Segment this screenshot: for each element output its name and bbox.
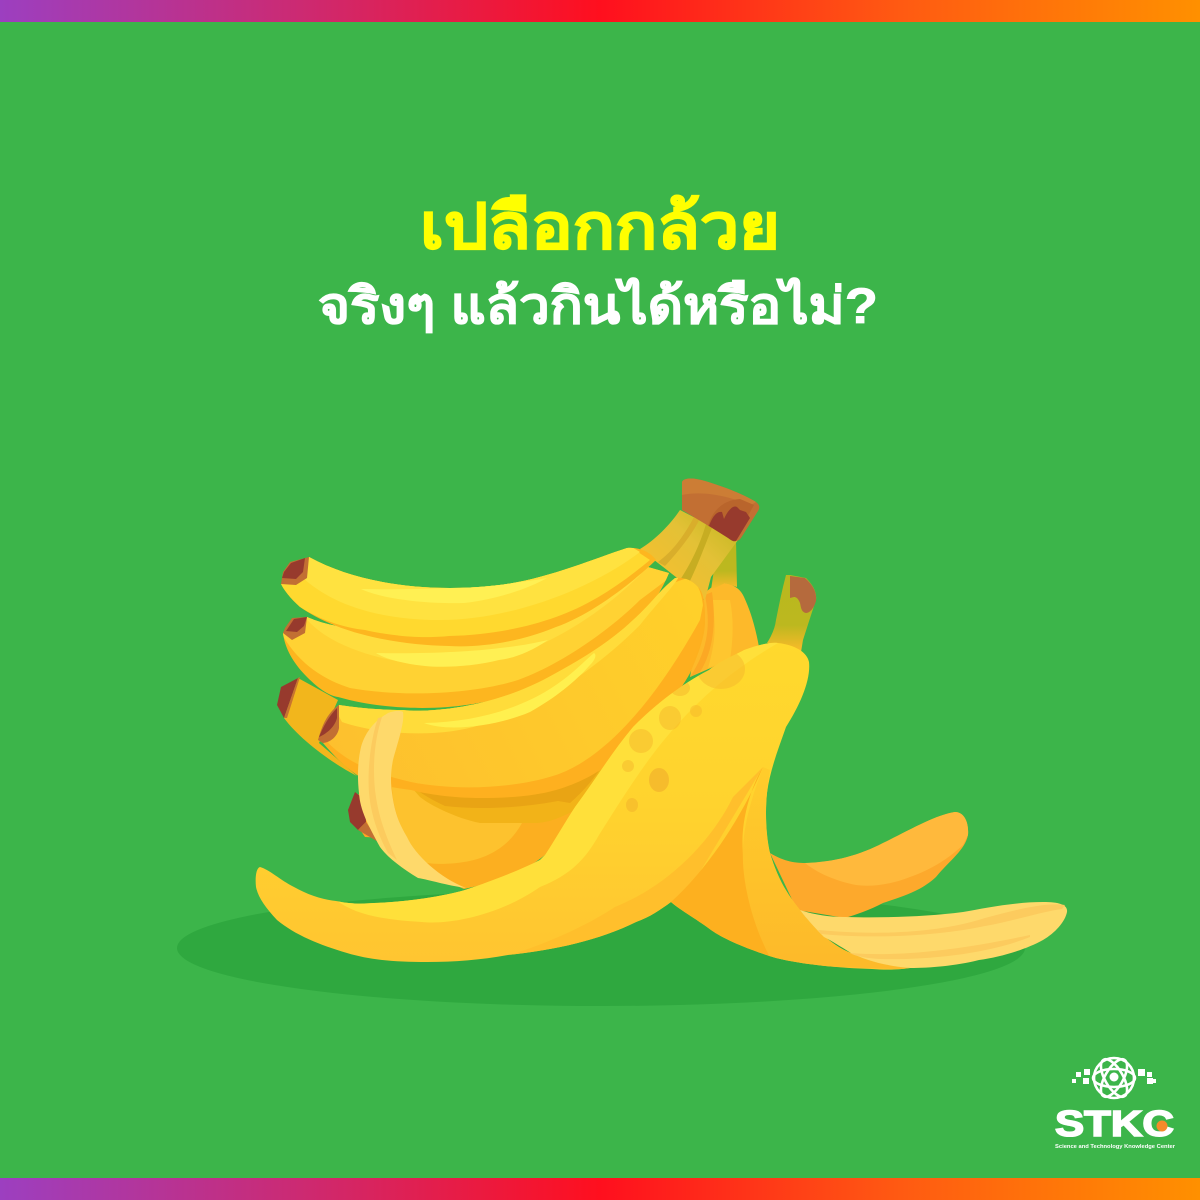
logo tagline: Science and Technology Knowledge Center xyxy=(1055,1144,1176,1150)
right leg strip xyxy=(743,767,920,970)
left pale peel flap xyxy=(358,711,466,888)
title xyxy=(318,193,878,334)
ground shadow xyxy=(177,890,1025,1006)
lower banana body xyxy=(385,760,620,889)
back left banana tip xyxy=(277,677,357,776)
main peel xyxy=(250,635,930,975)
bright inner strip xyxy=(336,643,778,923)
banana B tip xyxy=(283,617,307,640)
top gradient bar xyxy=(0,0,1200,22)
logo atom icon xyxy=(1093,1055,1135,1101)
highlight C xyxy=(424,653,595,727)
title line 1: เปลือกกล้วย xyxy=(420,193,780,262)
crown cut mark xyxy=(709,507,750,541)
banana A tip xyxy=(281,557,309,585)
banana bunch stem xyxy=(640,510,738,600)
left leg lower shade xyxy=(500,767,763,958)
logo pixels xyxy=(1072,1069,1156,1084)
banana illustration xyxy=(250,478,1067,975)
right back peel arm xyxy=(770,812,968,918)
bottom gradient bar xyxy=(0,1178,1200,1200)
peel tip stem xyxy=(767,575,816,652)
right leg shade xyxy=(671,767,772,960)
banana A xyxy=(281,548,656,646)
right pale peel xyxy=(800,902,1067,968)
C right shade xyxy=(682,588,704,686)
banana C tip xyxy=(318,705,339,743)
highlight A xyxy=(361,578,547,603)
underside shadow xyxy=(405,760,606,823)
bunch crown xyxy=(682,478,759,541)
banana B xyxy=(283,567,669,708)
highlight B xyxy=(376,640,548,667)
peel spots xyxy=(622,649,745,812)
back banana xyxy=(690,583,759,677)
banana C xyxy=(320,578,705,798)
logo wordmark: STKC xyxy=(1055,1103,1174,1144)
green inner stem xyxy=(711,535,737,590)
logo orange dot xyxy=(1156,1120,1168,1132)
logo xyxy=(1055,1055,1176,1150)
peel tip cap xyxy=(790,576,816,613)
lower bunch banana tip xyxy=(348,780,420,843)
title line 2: จริงๆ แล้วกินได้หรือไม่? xyxy=(318,277,878,334)
